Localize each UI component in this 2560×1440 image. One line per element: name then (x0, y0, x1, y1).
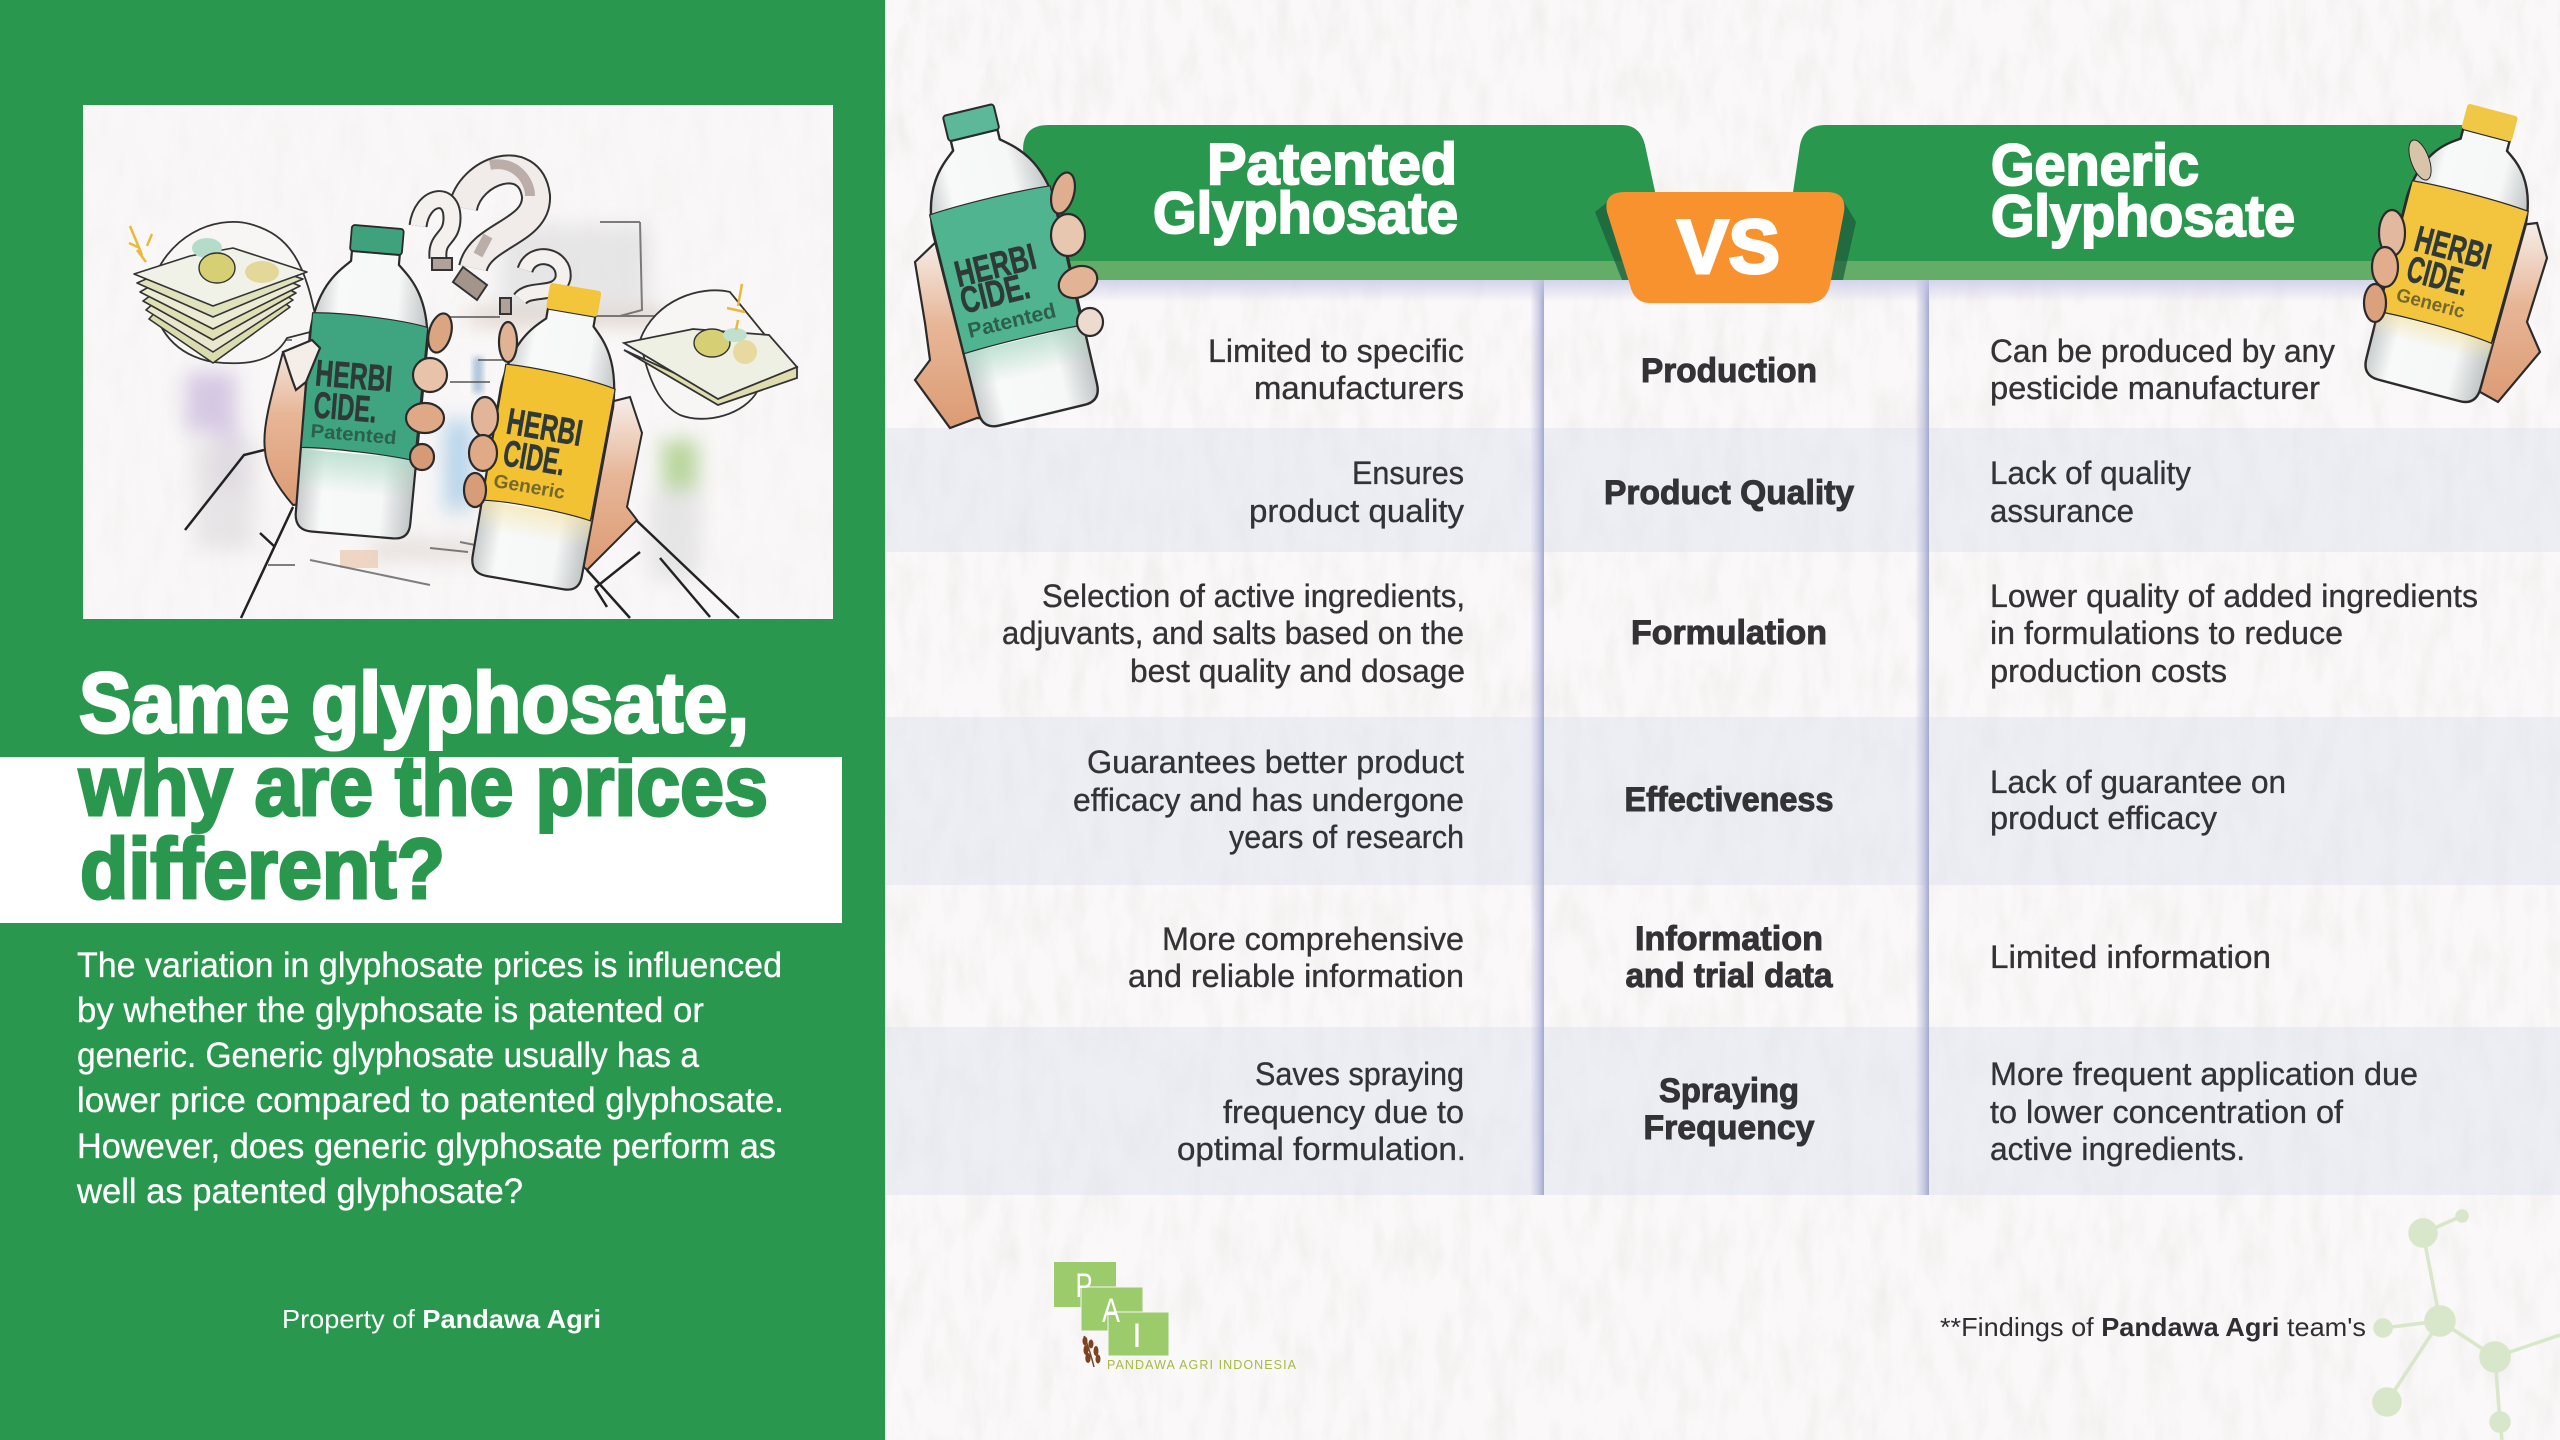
intro paragraph (76, 945, 784, 1211)
generic cell: to lower concentration of (1990, 1094, 2343, 1130)
criterion label: Spraying (1659, 1072, 1799, 1110)
criterion label: Production (1641, 352, 1817, 390)
row: spraying frequency (1177, 1056, 2418, 1167)
row: information and trial data (1128, 920, 2271, 995)
bottle in hand: patented: HERBI (951, 236, 1040, 295)
logo: Pandawa Agri Indonesia: P (1076, 1267, 1092, 1305)
patented cell (1128, 921, 1464, 994)
patented cell (1208, 333, 1464, 406)
question marks (418, 164, 563, 314)
patented cell: Ensures (1352, 455, 1464, 491)
bottle in hand: generic (2360, 94, 2552, 406)
patented cell: years of research (1229, 819, 1464, 855)
criterion label: Effectiveness (1624, 781, 1834, 819)
patented cell (1002, 578, 1465, 689)
patented cell: Selection of active ingredients, (1042, 578, 1465, 614)
intro paragraph: generic. Generic glyphosate usually has a (77, 1035, 699, 1075)
header: generic glyphosate: Generic (1991, 133, 2199, 198)
intro paragraph: The variation in glyphosate prices is influenced (77, 945, 782, 985)
header: generic glyphosate: Glyphosate (1991, 184, 2295, 249)
title: different? (80, 822, 445, 917)
bottle: generic (illustration): Generic (492, 471, 567, 504)
intro paragraph: lower price compared to patented glyphosate. (77, 1080, 784, 1120)
patented cell: Guarantees better product (1087, 744, 1464, 780)
title: Same glyphosate, (79, 656, 749, 751)
generic cell: product efficacy (1990, 800, 2217, 836)
intro paragraph: by whether the glyphosate is patented or (77, 990, 704, 1030)
title: why are the prices (78, 739, 768, 834)
header drop shadow (1060, 280, 2460, 302)
bottle: patented (illustration): HERBI (314, 352, 394, 400)
right hand back (576, 397, 642, 570)
row: effectiveness (1073, 744, 2286, 855)
column dividers (1530, 280, 1929, 1195)
bottle: generic (illustration) (471, 283, 616, 591)
bottle: patented (illustration): CIDE. (312, 384, 378, 430)
patented cell: efficacy and has undergone (1073, 782, 1464, 818)
header: patented glyphosate: Patented (1207, 132, 1457, 197)
patented cell: adjuvants, and salts based on the (1002, 615, 1464, 651)
criterion label: Information (1635, 920, 1823, 958)
generic cell: pesticide manufacturer (1990, 370, 2320, 406)
title highlight band (0, 757, 842, 923)
sleeves and arms (185, 450, 739, 618)
patented cell: Limited to specific (1208, 333, 1464, 369)
criterion label (1644, 1072, 1815, 1147)
footnote: **Findings of Pandawa Agri team's (1940, 1312, 2366, 1342)
patented cell: optimal formulation. (1177, 1131, 1466, 1167)
money left (129, 222, 318, 363)
bottle in hand: patented (907, 95, 1103, 430)
generic cell: in formulations to reduce (1990, 615, 2343, 651)
right hand fingers (464, 322, 517, 507)
generic cell (1990, 764, 2286, 836)
criterion label: Formulation (1631, 614, 1827, 652)
background smudges (186, 225, 700, 580)
criterion label (1626, 920, 1834, 995)
bottle: generic (illustration): HERBI (504, 401, 586, 454)
bottle: patented (illustration): Patented (310, 421, 397, 449)
generic cell: active ingredients. (1990, 1131, 2245, 1167)
patented cell: frequency due to (1223, 1094, 1464, 1130)
generic cell: assurance (1990, 493, 2134, 529)
logo: Pandawa Agri Indonesia: A (1102, 1292, 1120, 1330)
logo: Pandawa Agri Indonesia: PANDAWA AGRI INDONESIA (1107, 1358, 1297, 1372)
bottle in hand: generic: CIDE. (2403, 248, 2473, 304)
generic cell (1990, 455, 2191, 529)
intro paragraph: However, does generic glyphosate perform as (77, 1126, 776, 1166)
generic cell (1990, 333, 2335, 406)
logo: Pandawa Agri Indonesia: I (1132, 1317, 1142, 1355)
generic cell (1990, 578, 2478, 689)
header: generic glyphosate (1780, 125, 2480, 280)
left hand back (263, 340, 308, 506)
generic cell: production costs (1990, 653, 2227, 689)
generic cell: Lack of quality (1990, 455, 2191, 491)
bottle in hand: patented: CIDE. (956, 265, 1034, 321)
patented cell: Saves spraying (1255, 1056, 1464, 1092)
patented cell: More comprehensive (1162, 921, 1464, 957)
illustration: two herbicide bottles and money (83, 105, 833, 619)
logo: Pandawa Agri Indonesia (1054, 1262, 1297, 1372)
patented cell: and reliable information (1128, 958, 1464, 994)
patented cell (1249, 455, 1464, 529)
generic cell: More frequent application due (1990, 1056, 2418, 1092)
patented cell: manufacturers (1254, 370, 1464, 406)
money right (624, 284, 797, 419)
generic cell (1990, 1056, 2418, 1167)
bottle in hand: patented: Patented (965, 299, 1058, 343)
bottle in hand: generic: HERBI (2411, 218, 2495, 277)
header: patented glyphosate (1023, 125, 1674, 280)
generic cell: Lack of guarantee on (1990, 764, 2286, 800)
patented cell: best quality and dosage (1130, 653, 1465, 689)
generic cell: Lower quality of added ingredients (1990, 578, 2478, 614)
paper background (885, 0, 2560, 1440)
patented cell (1177, 1056, 1466, 1167)
header: patented glyphosate: Glyphosate (1153, 181, 1458, 246)
VS badge: VS (1677, 205, 1780, 290)
row: product quality (1249, 455, 2191, 529)
bottle: patented (illustration) (293, 222, 437, 540)
bottle in hand: generic: Generic (2394, 285, 2467, 323)
criterion label: Product Quality (1604, 474, 1854, 512)
row: production (1208, 333, 2335, 406)
criterion label: Frequency (1644, 1109, 1815, 1147)
patented cell: product quality (1249, 493, 1464, 529)
table row bands (885, 428, 2560, 1195)
bottle: generic (illustration): CIDE. (500, 432, 568, 483)
VS badge (1595, 192, 1856, 303)
row: formulation (1002, 578, 2478, 689)
decorative molecule (2374, 1211, 2560, 1440)
criterion label: and trial data (1626, 957, 1834, 995)
left hand thumb and fingers (283, 311, 456, 470)
property credit: Property of Pandawa Agri (282, 1304, 601, 1334)
left panel (0, 0, 885, 1440)
generic cell: Can be produced by any (1990, 333, 2335, 369)
generic cell: Limited information (1990, 939, 2271, 975)
intro paragraph: well as patented glyphosate? (76, 1171, 523, 1211)
title (78, 656, 768, 917)
patented cell (1073, 744, 1464, 855)
